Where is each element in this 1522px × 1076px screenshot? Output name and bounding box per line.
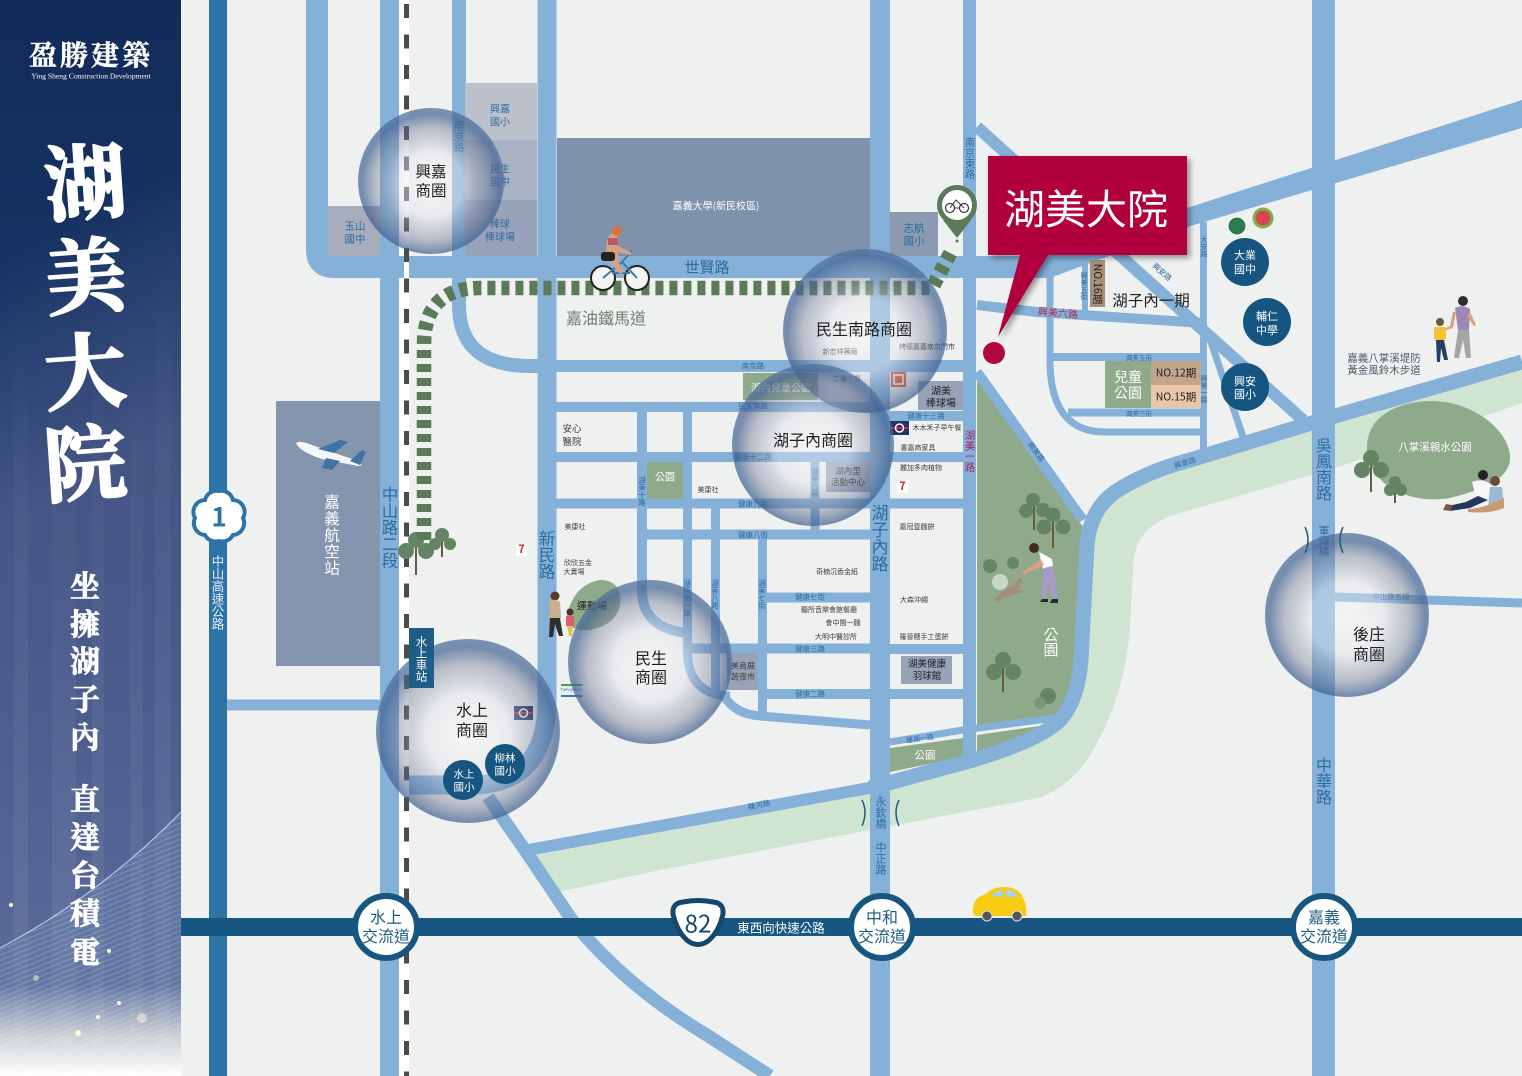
road labels: 南京東路 xyxy=(962,136,978,180)
block: Zhihang elementary: 志航 xyxy=(904,220,925,236)
Shuishang station label: 水上車站 xyxy=(414,636,430,683)
shop labels: 欣欣五金 xyxy=(564,558,592,568)
interchange: Chiayi xyxy=(1293,896,1355,958)
bike trail xyxy=(424,250,952,540)
bubble: Shuishang xyxy=(376,639,560,823)
school badges xyxy=(443,238,1291,800)
central grid horizontals xyxy=(556,366,1055,742)
road labels xyxy=(208,120,1410,876)
icon: cyclist xyxy=(591,226,649,290)
interchange: Shuishang xyxy=(355,896,417,958)
trees xyxy=(398,450,1407,709)
school badge text xyxy=(454,247,1278,794)
block: Yingshan junior high: 玉山 xyxy=(344,218,366,234)
school badge text: 國小 xyxy=(494,764,516,778)
school badge text: 大業 xyxy=(1234,247,1256,263)
road labels: 興美五街 xyxy=(1126,352,1152,362)
shop labels: 美康社 xyxy=(698,485,718,495)
sidebar slogan: 積 xyxy=(70,889,104,933)
road labels: 健康二路 xyxy=(795,688,825,700)
bubble labels: 商圈 xyxy=(456,717,488,741)
interchange: Zhonghe: 交流道 xyxy=(858,923,906,947)
logo: Ying Sheng Construction Development xyxy=(31,72,152,80)
road labels: 興美路 xyxy=(1025,440,1047,465)
logo: 盈勝建築 xyxy=(29,34,153,74)
icon: walking family xyxy=(1434,296,1476,362)
railway xyxy=(399,0,409,1076)
interchange: Chiayi: 交流道 xyxy=(1300,923,1348,947)
bubble labels: 興嘉 xyxy=(415,160,447,182)
road labels: 南京路 xyxy=(452,120,466,153)
school badge text: 水上 xyxy=(454,766,474,782)
block: badminton hall: 羽球館 xyxy=(913,668,941,682)
ring road and Shixian Road xyxy=(317,0,1050,267)
road labels: 吳鳳南路 xyxy=(1312,437,1336,501)
road labels: 興美六路 xyxy=(1037,303,1079,321)
block: Xingjia schools column: 興嘉 xyxy=(490,100,510,116)
callout: project name xyxy=(988,156,1187,337)
icon: freeway 1 plum shield xyxy=(193,491,245,541)
sidebar slogan xyxy=(70,562,104,972)
icon: parent and child left xyxy=(549,592,574,637)
shop labels: 嘉冠壹麵餅 xyxy=(900,522,934,532)
road labels: 永欽橋 xyxy=(873,795,889,830)
block: Xingjia schools column: 國中 xyxy=(490,174,510,188)
bubble labels: 商圈 xyxy=(1353,641,1385,665)
road labels: 新民路 xyxy=(535,530,559,580)
sidebar sparkles xyxy=(9,903,147,1036)
block: children's park and phases: 兒童 xyxy=(1114,367,1142,387)
shop labels: 二層午餐 xyxy=(833,374,861,384)
school badge text: 中學 xyxy=(1256,322,1278,338)
block: Chiayi Airport: 嘉義航空站 xyxy=(321,494,343,576)
icon: taiwan mobile stripes xyxy=(561,684,582,697)
shop labels: 木木禾子早午餐 xyxy=(912,423,962,433)
city park block xyxy=(890,380,1083,772)
road labels: 湖美十路 xyxy=(636,476,648,506)
icon: bike location pin xyxy=(940,188,974,242)
sidebar slogan: 台 xyxy=(70,851,101,895)
sidebar title xyxy=(40,117,130,520)
block: Zhihang elementary xyxy=(890,212,938,256)
shop labels: 大森沖繩 xyxy=(900,595,928,605)
block: Xingjia schools column: 棒球 xyxy=(490,216,510,230)
bubble labels: 商圈 xyxy=(415,179,447,201)
block: Chiayi Airport xyxy=(276,401,380,666)
road labels: 湖美六路 xyxy=(810,467,820,497)
sidebar wave xyxy=(0,812,181,1046)
shop labels: 醫院 xyxy=(562,434,582,448)
bubble labels: 民生南路商圈 xyxy=(816,316,912,340)
bridge marks xyxy=(862,527,1343,826)
road labels: 中正路 xyxy=(873,842,889,876)
interchange: Zhonghe: 中和 xyxy=(866,904,898,928)
school badge text: 輔仁 xyxy=(1256,308,1278,324)
bubble: Huzinei xyxy=(732,364,894,526)
label: Huzinei phase 1: 湖子內一期 xyxy=(1112,289,1190,311)
school badge text: 國小 xyxy=(454,780,475,794)
road labels: 健康八街 xyxy=(738,530,768,540)
shop labels: 書嘉商家具 xyxy=(900,443,936,453)
road labels: 軍輝橋 xyxy=(1316,525,1332,557)
shop labels: 大明中醫診所 xyxy=(815,632,857,642)
block: Yingshan junior high xyxy=(328,206,380,256)
school badge text: 國中 xyxy=(1234,261,1256,277)
northeast neighbourhood roads xyxy=(977,127,1522,603)
school badge text: 柳林 xyxy=(494,750,516,766)
road labels: 大安路 xyxy=(1199,235,1209,258)
road labels: 興美三街 xyxy=(1126,408,1152,418)
road labels: 興美五街 xyxy=(1079,271,1089,301)
park labels: 公園 xyxy=(1040,627,1062,657)
shop labels: 美康社 xyxy=(564,522,586,532)
label: windchime trail: 嘉義八掌溪堤防 xyxy=(1347,350,1421,366)
green riverside belt xyxy=(532,370,1522,892)
block: badminton hall: 湖美健康 xyxy=(908,656,946,670)
diagonal southwest road xyxy=(488,797,770,1076)
sidebar slogan: 坐 xyxy=(70,562,101,606)
label: windchime trail: 黃金風鈴木步道 xyxy=(1347,362,1421,378)
freeway 1 xyxy=(209,0,227,1076)
icon: airplane xyxy=(296,440,366,470)
sidebar title: 美 xyxy=(40,211,130,333)
bubble labels: 後庄 xyxy=(1353,621,1385,645)
shop labels xyxy=(562,342,962,642)
block: Xingjia schools column: 國小 xyxy=(490,114,510,128)
block: Hunei activity centre: 湖內里 xyxy=(835,465,861,477)
expressway 82 xyxy=(181,918,1522,936)
school badge text: 國小 xyxy=(1234,386,1256,402)
block: Hunei activity centre xyxy=(826,462,870,492)
block: Xingjia schools column: 民生 xyxy=(490,160,510,176)
label: windchime trail xyxy=(1347,350,1421,378)
road labels: 健康七街 xyxy=(795,592,825,602)
park labels: 公園 xyxy=(914,748,936,762)
road labels: 蓮湖一路 xyxy=(905,732,935,746)
sidebar slogan: 直 xyxy=(70,775,100,819)
sidebar title: 院 xyxy=(40,398,130,520)
icon: colourful shop xyxy=(1254,209,1272,227)
bubble: Xingjia xyxy=(358,108,504,254)
block: sports field blob: 運動場 xyxy=(577,598,607,612)
interchange: Shuishang: 水上 xyxy=(370,904,402,928)
block: Chiayi University xyxy=(557,138,870,256)
icon: shop logo red xyxy=(891,372,906,387)
road labels: 湖美八路 xyxy=(710,579,720,609)
shop labels: 安心 xyxy=(562,421,582,435)
icon: route 82 shield: 82 xyxy=(685,904,711,940)
icon: car xyxy=(973,887,1026,921)
road labels: 南京路 xyxy=(742,360,765,372)
interchange: Shuishang: 交流道 xyxy=(362,923,410,947)
block: Humei baseball field: 棒球場 xyxy=(926,394,956,410)
shop labels: 奇楠沉香金紙 xyxy=(816,567,858,577)
road labels: 蓮河路 xyxy=(747,797,772,813)
shop labels: 麗加多肉植物 xyxy=(900,463,942,473)
road labels: 興安路 xyxy=(1150,260,1174,284)
block: night market: 美商展 xyxy=(731,660,755,672)
block: night market xyxy=(727,653,758,690)
road labels: 興業路 xyxy=(1173,454,1198,472)
block: phase 16: NO.16期 xyxy=(1090,264,1105,304)
road labels: 健康三路 xyxy=(795,644,825,654)
sidebar slogan: 電 xyxy=(70,928,100,972)
icon: taiwan mobile stripes: FamilyMart xyxy=(561,687,582,693)
block: Hunei children's park: 湖內兒童公園 xyxy=(751,380,811,394)
road labels: 湖美一路 xyxy=(962,430,978,473)
sidebar title: 湖 xyxy=(40,117,130,239)
road labels: 中山路二段 xyxy=(378,486,402,569)
block: Zhihang elementary: 國小 xyxy=(904,234,925,248)
shop labels: 新宏祥藥局 xyxy=(822,347,858,357)
block: Hunei children's park xyxy=(743,373,818,400)
block: badminton hall xyxy=(901,656,952,684)
callout: project name: 湖美大院 xyxy=(1004,176,1168,236)
block: Xingjia schools column xyxy=(465,83,537,256)
west side connector xyxy=(227,700,380,710)
road labels: 湖子內路 xyxy=(868,504,892,572)
bubble: Minsheng South Road xyxy=(783,249,947,413)
Bajiang river park xyxy=(1367,401,1510,499)
bubble: Minsheng xyxy=(568,580,732,744)
label: east-west expressway: 東西向快速公路 xyxy=(737,918,825,936)
icon: route 82 shield xyxy=(673,900,723,944)
icon: couple on grass xyxy=(1443,470,1504,512)
block: Humei baseball field xyxy=(918,381,963,410)
sidebar slogan: 達 xyxy=(70,813,100,857)
main vertical roads xyxy=(380,0,399,1076)
interchange: Zhonghe xyxy=(851,896,913,958)
bubble labels: 民生 xyxy=(635,645,667,669)
sidebar title: 大 xyxy=(40,306,130,428)
road labels: 世賢路 xyxy=(684,256,730,278)
road labels: 健康九路 xyxy=(738,498,768,510)
road labels: 湖美七街 xyxy=(756,579,768,610)
site marker dot xyxy=(983,342,1005,364)
block: Chiayi University: 嘉義大學(新民校區) xyxy=(673,198,759,212)
block: night market: 蔬夜市 xyxy=(731,672,755,682)
road labels: 健康十三路 xyxy=(907,410,945,422)
shop labels: 會中閩一麵 xyxy=(826,618,860,628)
icon: 7-eleven logos xyxy=(516,478,908,557)
road labels: 興美一路 xyxy=(1199,374,1209,404)
park labels xyxy=(914,627,1062,762)
block: Xingjia schools column: 棒球場 xyxy=(485,228,515,244)
interchange: Chiayi: 嘉義 xyxy=(1308,904,1340,928)
shop labels: 聽所音樂會館餐廳 xyxy=(801,605,857,615)
shop labels: 羅晉糖手工蛋餅 xyxy=(900,632,948,642)
shop labels: 烤德嘉義南京門市 xyxy=(899,342,955,352)
road labels: 中華路 xyxy=(1312,757,1336,805)
school badge text: 興安 xyxy=(1234,373,1256,389)
road labels: 嘉油鐵馬道 xyxy=(566,305,646,329)
shop labels: 大賣場 xyxy=(564,567,584,577)
bubble labels: 湖子內商圈 xyxy=(773,427,853,451)
riverside road east part xyxy=(870,362,1522,788)
icon: Starbucks xyxy=(1228,217,1246,235)
road labels: 中山路五段 xyxy=(1372,592,1410,602)
block: children's park and phases xyxy=(1105,361,1201,408)
road labels: 湖美十一路 xyxy=(682,579,692,617)
sidebar slogan: 子 xyxy=(70,675,100,719)
sidebar slogan: 擁 xyxy=(70,600,100,644)
icon: 7-eleven logos: 7 xyxy=(899,478,906,494)
sidebar panel xyxy=(0,0,181,1076)
icon: freeway 1 plum shield: 1 xyxy=(211,498,227,534)
icon: station marks xyxy=(514,421,909,720)
Bajiang river park: 八掌溪親水公園 xyxy=(1398,440,1472,454)
bubble labels xyxy=(415,160,1385,741)
block: children's park and phases: 公園 xyxy=(1114,383,1142,403)
road labels: 中山高速公路 xyxy=(208,554,228,630)
road labels: 民生南路 xyxy=(738,400,768,412)
block: Hunei activity centre: 活動中心 xyxy=(831,476,865,488)
bubble labels: 水上 xyxy=(456,697,488,721)
sidebar bottom fade xyxy=(0,985,181,1076)
icon: 7-eleven logos: 7 xyxy=(518,541,525,557)
block: sports field blob xyxy=(566,580,620,630)
road labels: 健康十二路 xyxy=(734,452,772,462)
central grid verticals xyxy=(642,407,815,712)
bubble: Houzhuang xyxy=(1265,533,1429,697)
sidebar slogan: 內 xyxy=(70,713,100,757)
block: small park: 公園 xyxy=(655,468,675,484)
block: Humei baseball field: 湖美 xyxy=(931,382,951,398)
block: small park xyxy=(647,462,683,499)
icon: woman with dog xyxy=(994,543,1058,603)
Shuishang station label xyxy=(409,628,434,688)
block: Yingshan junior high: 國中 xyxy=(344,232,366,246)
block: children's park and phases: NO.12期 xyxy=(1156,366,1196,380)
sidebar slogan: 湖 xyxy=(70,637,100,681)
bubble labels: 商圈 xyxy=(635,664,667,688)
block: children's park and phases: NO.15期 xyxy=(1156,390,1196,404)
Lianhe road west part xyxy=(523,786,880,851)
